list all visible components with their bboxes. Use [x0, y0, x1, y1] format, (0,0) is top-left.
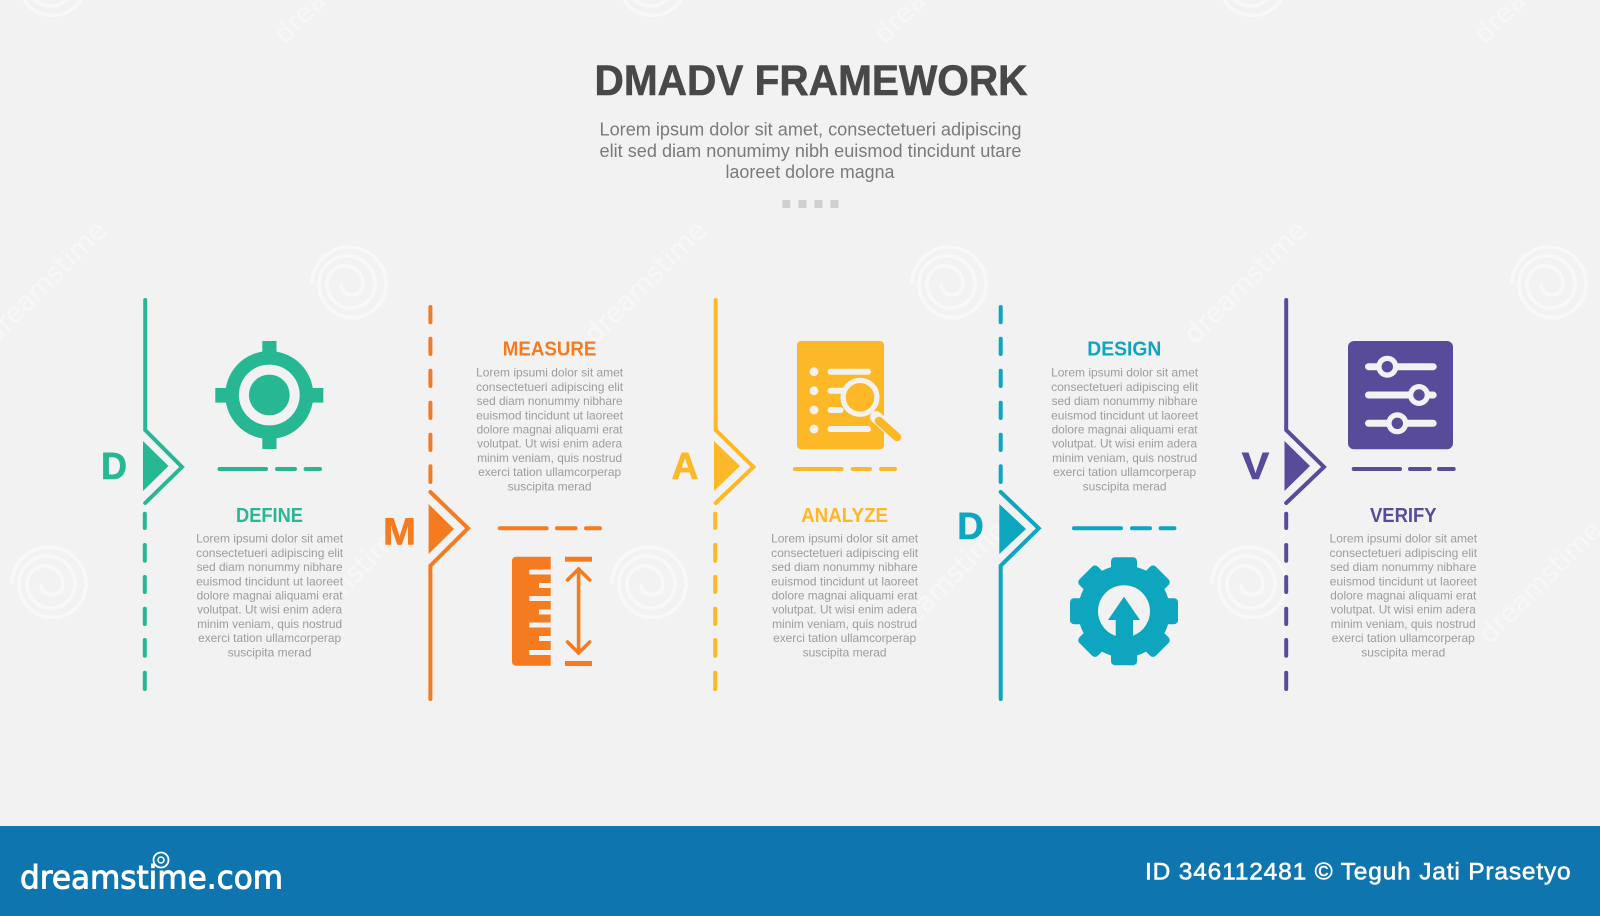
footer logo: dreamstime.com [20, 859, 283, 897]
text block: minim veniam, quis nostrud [1052, 451, 1197, 465]
footer bar [0, 826, 1600, 916]
panel: define [101, 300, 344, 689]
text block: sed diam nonummy nibhare [1052, 394, 1198, 408]
text block: suscipita merad [803, 645, 887, 659]
icon: ruler and height arrow [512, 557, 592, 666]
text block: minim veniam, quis nostrud [772, 617, 917, 631]
step letter: D [957, 506, 984, 548]
text block: dolore magnai aliquami erat [1052, 422, 1198, 436]
subtitle: laoreet dolore magna [726, 162, 895, 182]
timeline and chevron [1284, 300, 1324, 689]
heading: DEFINE [236, 505, 303, 527]
text block: suscipita merad [508, 479, 592, 493]
text block: Lorem ipsumi dolor sit amet [1330, 532, 1478, 546]
subtitle [600, 120, 1022, 182]
text block: suscipita merad [1361, 645, 1445, 659]
text block: dolore magnai aliquami erat [477, 422, 623, 436]
step letter: M [383, 512, 416, 554]
text block: sed diam nonummy nibhare [197, 560, 343, 574]
icon: sliders panel [1348, 341, 1453, 449]
text block: consectetueri adipiscing elit [1051, 380, 1199, 394]
text block: minim veniam, quis nostrud [1331, 617, 1476, 631]
text block: dolore magnai aliquami erat [1330, 588, 1477, 602]
text block: euismod tincidunt ut laoreet [1051, 408, 1199, 422]
title pagination dots [782, 200, 838, 208]
text block: volutpat. Ut wisi enim adera [1052, 437, 1197, 451]
text block: minim veniam, quis nostrud [197, 617, 342, 631]
text block: volutpat. Ut wisi enim adera [197, 603, 342, 617]
icon: target [215, 341, 323, 449]
title: DMADV FRAMEWORK [594, 57, 1028, 105]
watermark pattern [0, 0, 1600, 650]
text block: euismod tincidunt ut laoreet [771, 574, 919, 588]
panel: verify [1242, 300, 1478, 689]
heading: DESIGN [1087, 338, 1161, 360]
text block: dolore magnai aliquami erat [197, 588, 343, 602]
text block: exerci tation ullamcorperap [198, 631, 341, 645]
divider [795, 467, 895, 471]
text block: consectetueri adipiscing elit [771, 546, 919, 560]
text block: exerci tation ullamcorperap [1332, 631, 1475, 645]
text block: Lorem ipsumi dolor sit amet [1051, 366, 1199, 380]
text block: consectetueri adipiscing elit [196, 546, 344, 560]
text block [771, 532, 919, 659]
text block: exerci tation ullamcorperap [773, 631, 916, 645]
divider [220, 467, 320, 471]
step letter: A [672, 446, 698, 488]
text block: Lorem ipsumi dolor sit amet [476, 366, 624, 380]
divider [500, 526, 600, 530]
step letter: V [1242, 446, 1270, 488]
panel: analyze [672, 300, 919, 689]
text block: euismod tincidunt ut laoreet [1330, 574, 1477, 588]
text block: sed diam nonummy nibhare [772, 560, 918, 574]
watermark pattern: dreamstime [878, 515, 1013, 650]
icon: document with magnifier [797, 341, 899, 449]
text block: sed diam nonummy nibhare [477, 394, 623, 408]
text block: dolore magnai aliquami erat [772, 588, 918, 602]
heading: ANALYZE [801, 505, 888, 527]
text block [196, 532, 344, 659]
timeline and chevron [429, 307, 468, 699]
text block: sed diam nonummy nibhare [1330, 560, 1477, 574]
text block: minim veniam, quis nostrud [477, 451, 622, 465]
timeline and chevron [999, 307, 1039, 699]
panel: design [957, 307, 1199, 699]
text block: suscipita merad [228, 645, 312, 659]
text block: exerci tation ullamcorperap [1053, 465, 1196, 479]
panel: measure [383, 307, 624, 699]
icon: gear with up arrow [1070, 557, 1178, 665]
subtitle: Lorem ipsum dolor sit amet, consectetueri adipiscing [600, 120, 1022, 140]
heading: MEASURE [503, 338, 596, 360]
text block: suscipita merad [1083, 479, 1167, 493]
step letter: D [101, 446, 127, 488]
text block: euismod tincidunt ut laoreet [476, 408, 624, 422]
footer credit: ID 346112481 © Teguh Jati Prasetyo [1145, 858, 1571, 885]
divider [1074, 526, 1174, 530]
text block [1330, 532, 1478, 659]
text block: Lorem ipsumi dolor sit amet [196, 532, 344, 546]
text block: euismod tincidunt ut laoreet [196, 574, 344, 588]
watermark pattern: dreamstime [578, 215, 713, 350]
text block: consectetueri adipiscing elit [476, 380, 624, 394]
text block: consectetueri adipiscing elit [1330, 546, 1478, 560]
timeline and chevron [714, 300, 753, 689]
divider [1354, 467, 1454, 471]
subtitle: elit sed diam nonumimy nibh euismod tincidunt utare [600, 141, 1022, 161]
watermark pattern: dreamstime [1178, 215, 1313, 350]
text block: volutpat. Ut wisi enim adera [772, 603, 917, 617]
watermark pattern: dreamstime [278, 515, 413, 650]
text block: Lorem ipsumi dolor sit amet [771, 532, 919, 546]
text block: exerci tation ullamcorperap [478, 465, 621, 479]
text block: volutpat. Ut wisi enim adera [1331, 603, 1476, 617]
timeline and chevron [143, 300, 182, 689]
heading: VERIFY [1370, 505, 1437, 527]
text block [476, 366, 624, 493]
text block [1051, 366, 1199, 493]
text block: volutpat. Ut wisi enim adera [477, 437, 622, 451]
